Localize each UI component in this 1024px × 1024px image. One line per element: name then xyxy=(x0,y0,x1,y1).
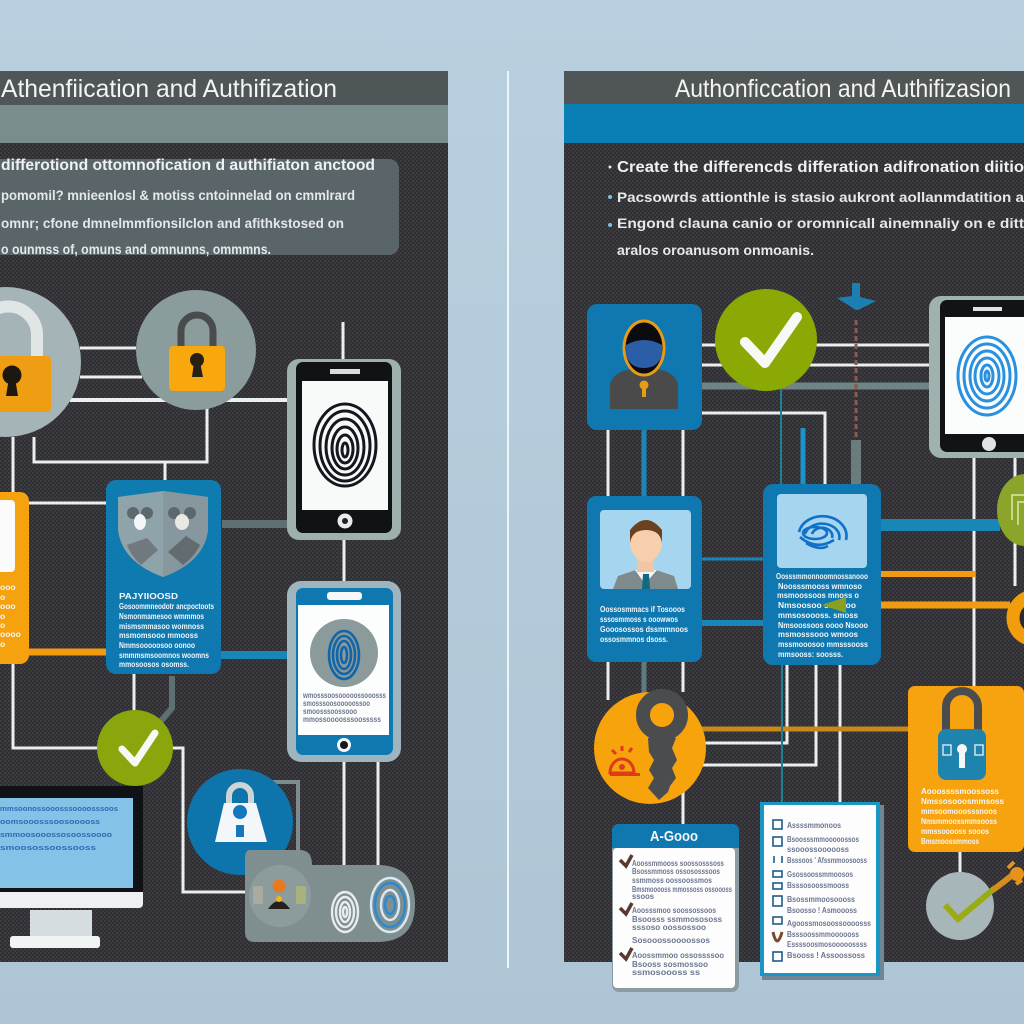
icon: orange ring xyxy=(1013,596,1024,640)
left grey band xyxy=(0,105,448,143)
orange lock card: mmssooooss sooos xyxy=(921,826,989,836)
icon: green check xyxy=(97,710,173,786)
left intro text block: pomomil? mnieenlosl & motiss cntoinnelad on cmmlrard xyxy=(1,187,355,203)
blue shield card: Nmmsooooosoo oonoo xyxy=(119,640,195,650)
fingerprint detail card: msmoossoos mnoss o xyxy=(777,590,859,600)
orange lock card: Aooossssmoossoss xyxy=(921,786,999,796)
icon: phone with blue fingerprint: wmosssoosooooossooosss xyxy=(302,691,386,700)
person profile card: Gooosossos dssmmnoos xyxy=(600,624,688,634)
right blue band xyxy=(564,104,1024,143)
icon: phone with blue fingerprint: mmossoooosssoosssss xyxy=(303,715,381,724)
checkbox list card: Bsooss ! Assoossoss xyxy=(787,951,866,960)
left title bar: Athenfiication and Authifization xyxy=(1,75,337,103)
orange side card xyxy=(0,492,29,664)
icon: key in orange circle xyxy=(594,692,706,804)
right title bar xyxy=(564,71,1024,104)
orange side card: ooo xyxy=(0,582,16,592)
icon: checkboxes xyxy=(773,820,782,961)
icon: desktop monitor: smmoosooossosoossoooo xyxy=(0,832,112,839)
panel: right authorization xyxy=(564,71,1024,992)
checkbox list card xyxy=(760,802,884,980)
left intro text block: differotiond ottomnofication d authifiaton anctood xyxy=(1,157,375,174)
right bullet text block xyxy=(608,159,1024,258)
blue checklist card: ssmmoss oossoossmos xyxy=(632,876,712,885)
blue shield card: msmomsooo mmooss xyxy=(119,630,198,640)
icon: phone with blue fingerprint xyxy=(287,581,401,762)
right bullet text block: Pacsowrds attionthle is stasio aukront aollanmdatition a xyxy=(617,189,1024,205)
blue shield card: smmmsmsoomnos woomns xyxy=(119,650,209,660)
left title bar xyxy=(0,71,448,105)
blue checklist card: Aoossmmooss soossosssoss xyxy=(632,859,724,868)
blue checklist card: Bmsmooooss mmossoss ossoooss xyxy=(632,885,732,894)
icon: desktop monitor xyxy=(0,786,143,948)
blue checklist card: Aoosssmoo soossossoos xyxy=(632,906,716,915)
checkbox list card: ssooossoooooss xyxy=(787,845,850,854)
icon: phone with blue fingerprint: smoosssoossooo xyxy=(303,707,357,716)
checkbox list card: Agoossmosoossoooosss xyxy=(787,919,871,928)
checkbox list card: Bsoosssmmooooossos xyxy=(787,835,859,844)
icon: check and key in grey circle xyxy=(926,862,1024,940)
fingerprint detail card: msmosssooo wmoos xyxy=(778,629,858,639)
fingerprint detail card: Nmsoosoo sss ooo xyxy=(778,600,856,610)
blue checklist card: ssoos xyxy=(632,892,655,901)
blue checklist card xyxy=(612,824,739,992)
icon: padlock in small circle xyxy=(136,290,256,410)
orange lock card: Nmssosooosmmsoss xyxy=(921,796,1004,806)
blue checklist card: Aoossmmoo ossossssoo xyxy=(632,951,724,960)
orange side card: o xyxy=(0,592,5,602)
icon: check marks xyxy=(620,855,632,959)
person profile card: Oossosmmacs if Tosooos xyxy=(600,604,685,614)
blue checklist card: Sosooossoooossos xyxy=(632,936,711,945)
orange side card: o xyxy=(0,611,5,621)
blue checklist card: A-Gooo xyxy=(650,828,698,845)
blue shield card xyxy=(106,480,221,674)
left intro text block xyxy=(0,157,399,257)
icon: teal padlock xyxy=(938,691,986,780)
icon: green check large xyxy=(715,289,817,391)
blue checklist card: Bsoosss ssmmosososs xyxy=(632,915,723,924)
checkbox list card: Gsossoossmmoosos xyxy=(787,870,853,879)
checkbox list card: Essssoosmosooooossss xyxy=(787,940,867,949)
icon: biometric cluster xyxy=(245,850,415,942)
blue shield card: mismsmmasoo womnoss xyxy=(119,621,204,631)
blue checklist card: ssmosoooss ss xyxy=(632,968,701,977)
icon: blue arrow xyxy=(837,283,876,310)
icon: blue lock circle xyxy=(187,769,293,875)
icon: green leaf fingerprint xyxy=(997,474,1024,546)
fingerprint detail card: Nmsoossoos oooo Nsooo xyxy=(778,620,868,630)
fingerprint detail card: Noosssmooss wmnoso xyxy=(778,581,862,591)
fingerprint detail card: mmsooss: soosss. xyxy=(778,649,843,659)
person profile card xyxy=(587,496,702,662)
blue shield card: Nsmonmamesoo wmmmos xyxy=(119,611,204,621)
icon: shield xyxy=(118,491,208,577)
checkbox list card: Bsossmmoosoooss xyxy=(787,895,855,904)
orange side card: oooo xyxy=(0,629,21,639)
orange side card: o xyxy=(0,639,5,649)
icon: phone with fingerprint xyxy=(287,359,401,540)
icon: arrow head into card xyxy=(822,597,846,613)
blue checklist card: Bsossmmoss ossososssoos xyxy=(632,867,720,876)
orange side card: ooo xyxy=(0,601,16,611)
right bullet text block: Create the differencds differation adifronation diitio xyxy=(617,159,1024,176)
orange lock card: Nmsmmoossmmsooss xyxy=(921,816,997,826)
icon: hooded user card xyxy=(587,304,702,430)
checkbox list card: Bsoosso ! Asmoooss xyxy=(787,906,857,915)
icon: businessman avatar xyxy=(613,520,678,589)
checkbox list card: Assssmmonoos xyxy=(787,821,841,830)
right connector lines xyxy=(608,320,1015,872)
blue checklist card: Bsooss sosmossoo xyxy=(632,960,708,969)
orange lock card: mmsoomooosssnoos xyxy=(921,806,997,816)
icon: phone top right with fingerprint xyxy=(929,296,1024,458)
left intro text block: o ounmss of, omuns and omnunns, ommmns. xyxy=(1,241,271,257)
checkbox list card: Bsssoos ' Afssmmoosooss xyxy=(787,856,867,865)
person profile card: ossosmmnos dsoss. xyxy=(600,634,668,644)
right bullet text block: Engond clauna canio or oromnicall ainemnaliy on e ditt xyxy=(617,215,1024,231)
person profile card: sssosmmoss s ooowwos xyxy=(600,614,678,624)
fingerprint detail card xyxy=(763,484,881,665)
blue checklist card: sssoso oossossoo xyxy=(632,923,706,932)
checkbox list card: Bsssoossmmoooooss xyxy=(787,930,859,939)
orange lock card: Bmsmoossmmoss xyxy=(921,836,979,846)
icon: desktop monitor: mmsoonossooosssoooosssoos xyxy=(0,806,118,813)
icon: phone with blue fingerprint: smosssoosooooossoo xyxy=(303,699,370,708)
blue shield card: PAJYIIOOSD xyxy=(119,591,178,601)
right bullet text block: aralos oroanusom onmoanis. xyxy=(617,242,814,258)
left connector lines xyxy=(13,322,378,892)
icon: desktop monitor: oomsooosssoosooooss xyxy=(0,819,100,826)
panel: left authentication xyxy=(0,71,448,962)
blue shield card: mmosoosos osomss. xyxy=(119,659,189,669)
fingerprint detail card: Oosssmmonnoomnossanooo xyxy=(776,571,868,581)
icon: padlock in large circle xyxy=(0,287,81,437)
orange side card: o xyxy=(0,620,5,630)
icon: desktop monitor: smoosossoossooss xyxy=(0,845,96,852)
left intro text block: omnr; cfone dmnelmmfionsilclon and afithkstosed on xyxy=(1,215,344,231)
fingerprint detail card: mssmooosoo mmsssooss xyxy=(778,639,868,649)
fingerprint detail card: mmsosoooss. smoss xyxy=(778,610,858,620)
blue shield card: Gosoommneodotr ancpoctoots xyxy=(119,601,214,611)
checkbox list card: Bsssosoossmooss xyxy=(787,881,849,890)
orange lock card xyxy=(908,686,1024,852)
